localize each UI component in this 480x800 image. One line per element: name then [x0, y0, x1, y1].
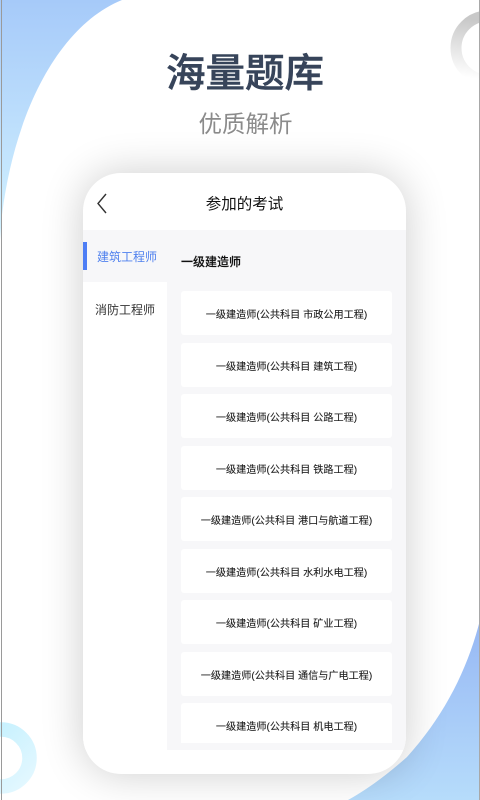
bottom-left cyan ring [0, 730, 30, 786]
card 4 [181, 446, 392, 490]
header title: 参加的考试 [206, 196, 283, 213]
card 1 [181, 291, 392, 335]
phone panel [83, 173, 406, 774]
card 5: 一级建造师(公共科目 港口与航道工程) [201, 516, 372, 527]
card 3: 一级建造师(公共科目 公路工程) [216, 413, 357, 424]
active tab label: 建筑工程师 [97, 250, 157, 264]
active tab marker [83, 242, 87, 270]
subtitle: 优质解析 [198, 111, 292, 137]
card 2 [181, 343, 392, 387]
card 1: 一级建造师(公共科目 市政公用工程) [206, 310, 367, 321]
top-left blue shape [0, 0, 122, 240]
left edge line [1, 0, 2, 800]
card 9: 一级建造师(公共科目 机电工程) [216, 722, 357, 733]
card 4: 一级建造师(公共科目 铁路工程) [216, 465, 357, 476]
card 8 [181, 652, 392, 696]
content background [83, 230, 406, 750]
card 9 [181, 703, 392, 743]
inactive tab label: 消防工程师 [95, 302, 155, 316]
right edge line [479, 0, 480, 800]
back icon [97, 194, 106, 214]
card 3 [181, 394, 392, 438]
card 6: 一级建造师(公共科目 水利水电工程) [206, 568, 367, 579]
card 2: 一级建造师(公共科目 建筑工程) [216, 362, 357, 373]
card 7: 一级建造师(公共科目 矿业工程) [216, 619, 357, 630]
sidebar [83, 282, 167, 750]
title: 海量题库 [166, 52, 324, 96]
top-right grey ring [456, 16, 480, 80]
card 6 [181, 549, 392, 593]
card 5 [181, 497, 392, 541]
card 7 [181, 600, 392, 644]
card 8: 一级建造师(公共科目 通信与广电工程) [201, 671, 372, 682]
bottom-right blue shape [348, 620, 480, 800]
section heading: 一级建造师 [181, 255, 241, 269]
